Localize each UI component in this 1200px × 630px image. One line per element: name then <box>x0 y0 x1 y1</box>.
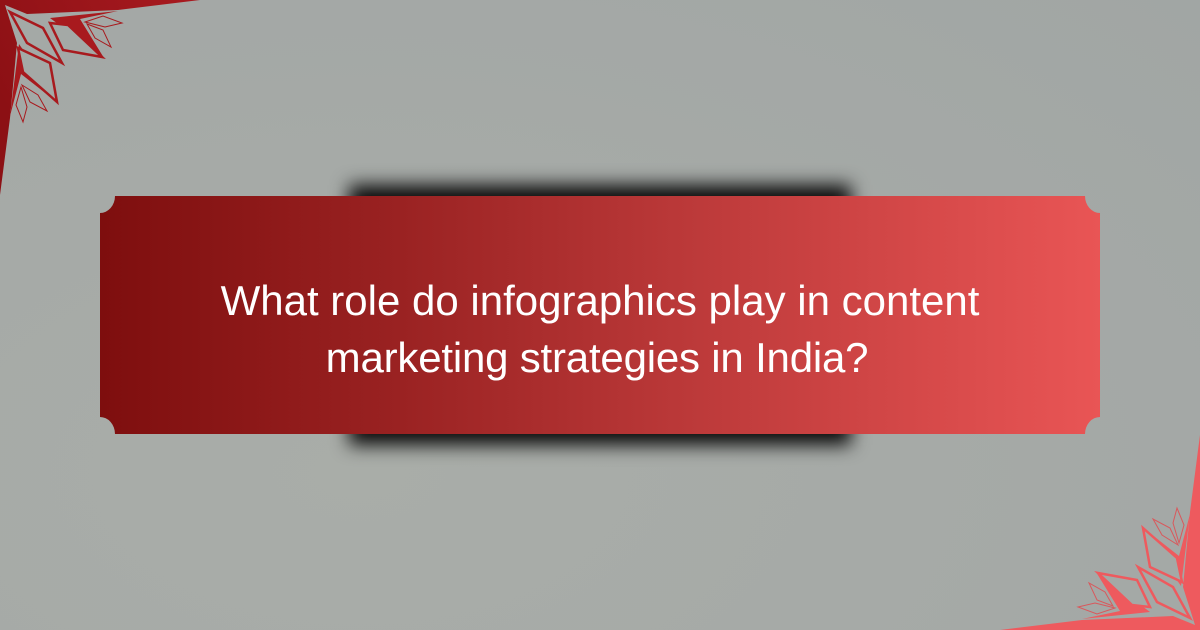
banner panel <box>100 196 1100 434</box>
top-left corner ornament <box>0 0 200 195</box>
page background: marketing strategies in India? <box>326 334 868 381</box>
page background: What role do infographics play in content <box>221 277 979 324</box>
title <box>220 277 980 381</box>
bottom-right corner ornament <box>1000 435 1200 630</box>
banner shadow <box>349 185 851 445</box>
